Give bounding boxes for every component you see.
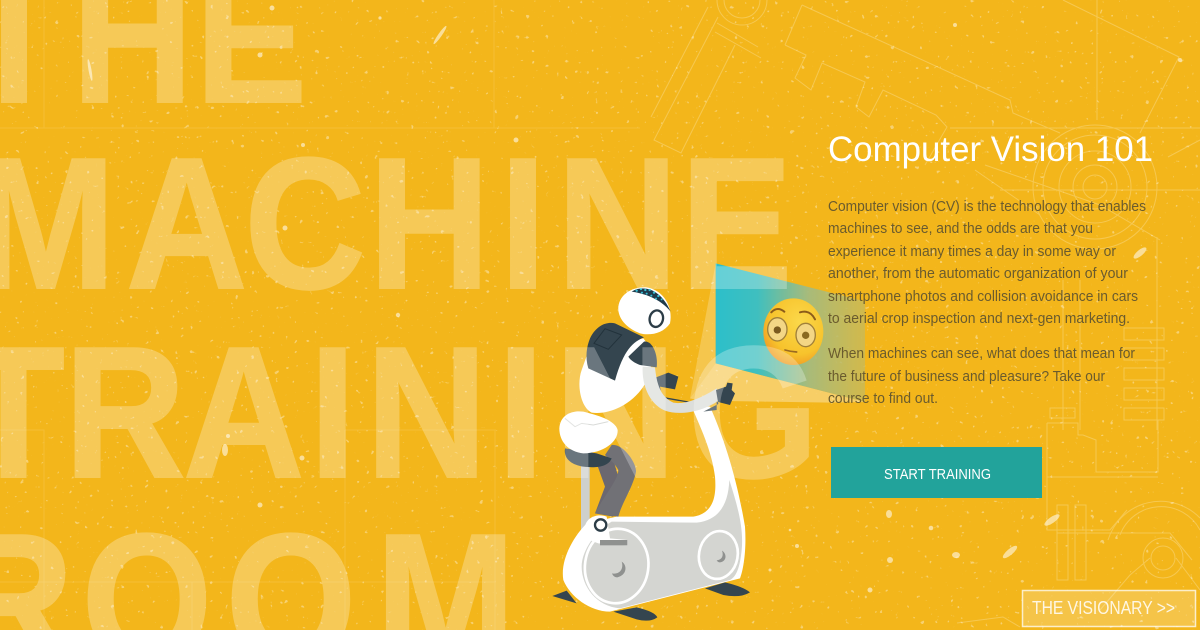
small wheel [695,528,742,582]
bike body panel [582,480,742,608]
the visionary link button [1022,590,1196,626]
robot back plate [587,323,644,381]
robot brain [632,288,671,312]
the visionary link button: THE VISIONARY >> [1032,597,1175,618]
blueprint line drawings [651,0,1200,627]
bike seat [565,448,612,467]
bike frame [563,407,745,612]
large background title: THE MACHINE TRAINING ROOM: MACHINE [0,119,793,328]
bike pedal ring [595,519,606,531]
large wheel [580,525,653,607]
bike seat post [581,457,590,538]
body paragraph one: experience it many times a day in some way or [828,244,1116,260]
robot torso [579,338,651,413]
robot hips [559,411,618,453]
body paragraph one: to aerial crop inspection and next-gen marketing. [828,311,1130,327]
robot front leg [595,445,636,517]
start training button [831,447,1042,498]
body paragraph two: When machines can see, what does that mean for [828,346,1135,362]
robot eye [648,309,665,328]
illustration: robot on exercise bike with vision projection [552,263,865,621]
robot back leg [595,460,619,517]
bike pedal [585,515,627,545]
robot near hand [703,383,735,412]
bike feet [552,582,750,621]
body paragraph one [828,199,1146,327]
emoji: flushed face [763,298,823,365]
body paragraph one: machines to see, and the odds are that you [828,221,1093,237]
robot shoulder [628,342,657,367]
body paragraph one: Computer vision (CV) is the technology that enables [828,199,1146,215]
light beam from hand [690,263,865,403]
body paragraph two: the future of business and pleasure? Take our [828,369,1105,385]
large background title: THE MACHINE TRAINING ROOM [0,0,818,630]
body paragraph two: course to find out. [828,391,938,407]
heading: Computer Vision 101 [828,130,1153,169]
body paragraph two [828,346,1135,407]
body paragraph one: another, from the automatic organization of your [828,266,1128,282]
vision projection screen [716,263,865,402]
robot far arm and hand [653,373,690,403]
start training button: START TRAINING [884,467,991,483]
robot near arm [643,367,719,413]
robot head [618,287,671,334]
body paragraph one: smartphone photos and collision avoidance in cars [828,289,1138,305]
faint layout rectangles [0,0,640,630]
